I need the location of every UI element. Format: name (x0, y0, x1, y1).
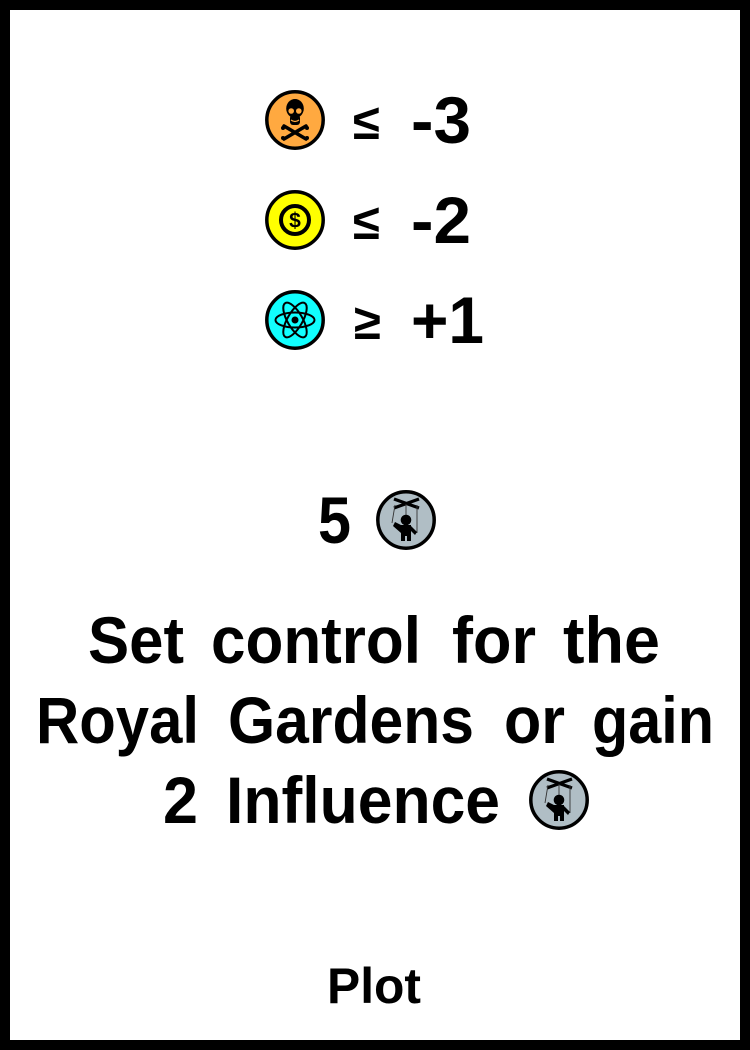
effect text: Set (88, 603, 184, 677)
icon: yellow coin: $ (289, 210, 301, 232)
cost number: 5 (318, 483, 351, 557)
effect text: or (504, 683, 565, 757)
icon: cyan atom (267, 292, 323, 348)
icon: orange skull (267, 92, 323, 148)
icon: influence puppet (531, 772, 587, 828)
requirement: skull at most -3 (267, 83, 471, 157)
effect text: for (452, 603, 536, 677)
effect text: control (211, 603, 421, 677)
value: -2 (411, 183, 471, 257)
requirement: science at least +1 (267, 283, 484, 357)
effect text: 2 (163, 763, 198, 837)
effect text: gain (592, 683, 714, 757)
effect text: Influence (226, 763, 500, 837)
influence cost (318, 483, 434, 557)
value: +1 (411, 283, 484, 357)
effect text: the (563, 603, 660, 677)
comparison symbol: ≥ (354, 294, 381, 350)
icon: yellow coin (267, 192, 323, 248)
comparison symbol: ≤ (353, 94, 380, 150)
requirement: money at most -2 (267, 183, 471, 257)
comparison symbol: ≤ (353, 194, 380, 250)
effect text (36, 603, 714, 837)
icon: influence puppet (378, 492, 434, 548)
card type label: Plot (327, 958, 421, 1014)
effect text: Royal (36, 683, 199, 757)
value: -3 (411, 83, 471, 157)
effect text: Gardens (228, 683, 474, 757)
